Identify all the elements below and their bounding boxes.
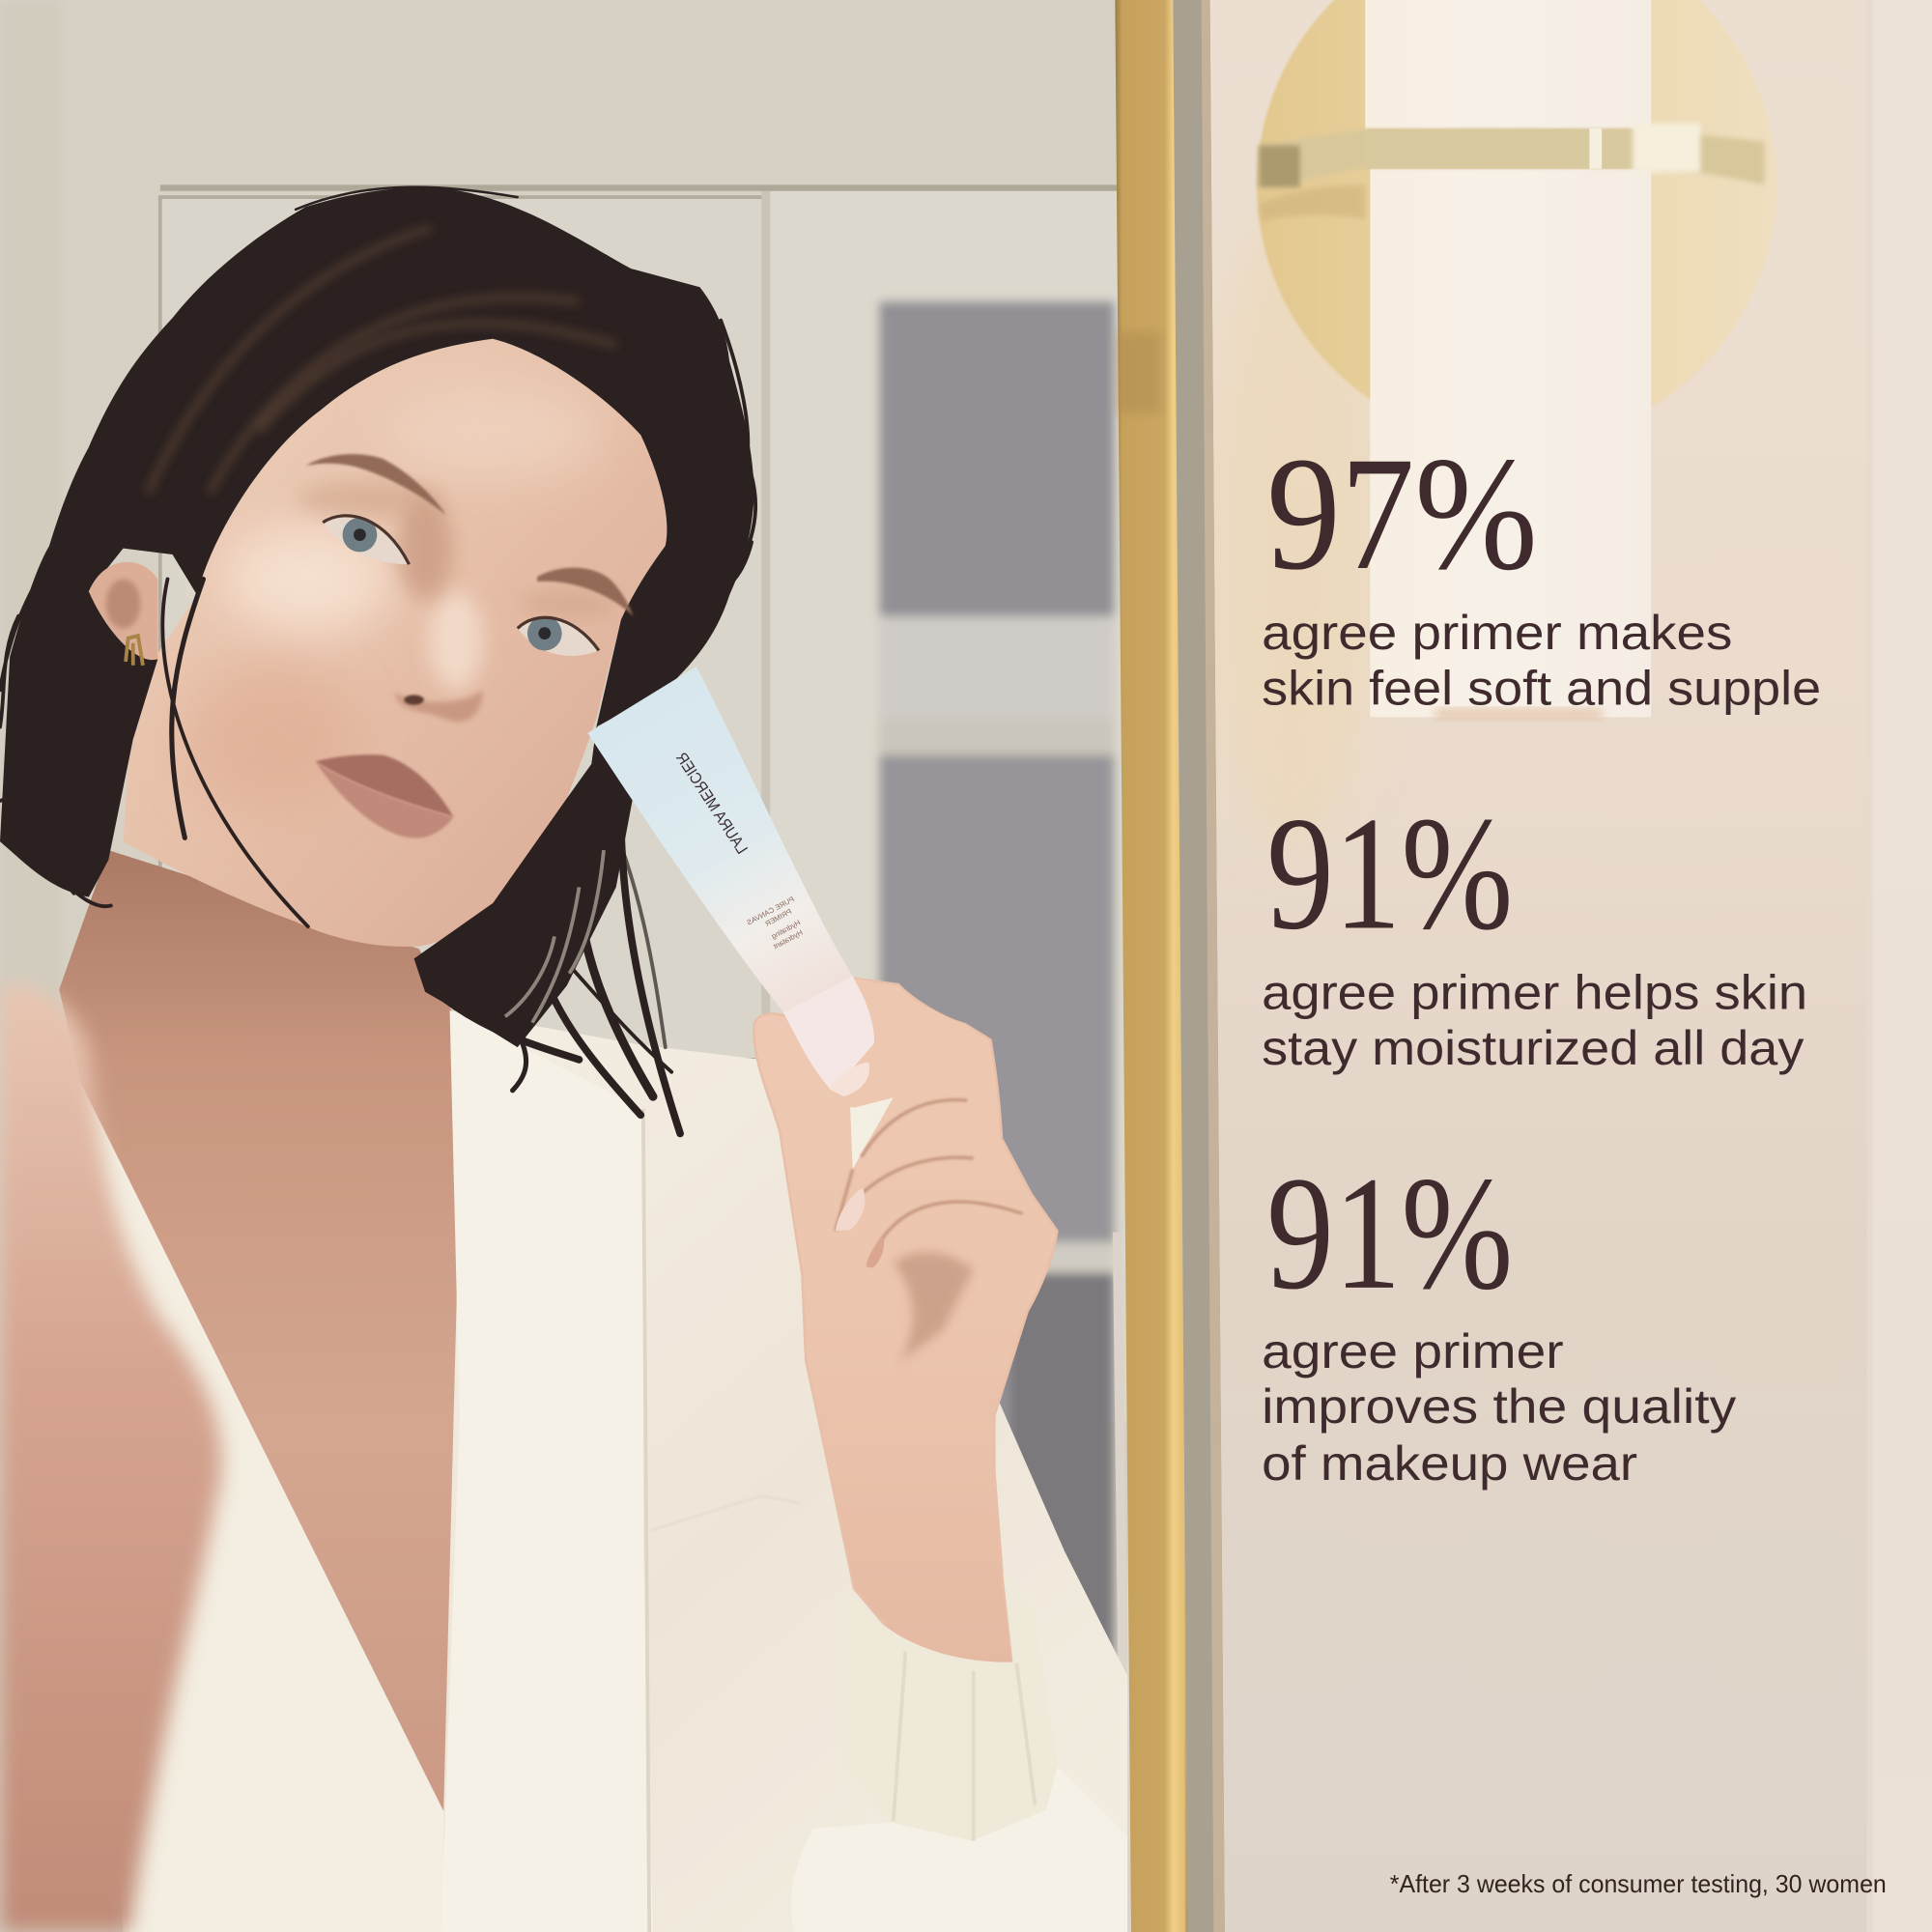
nose	[394, 690, 483, 722]
robe body	[74, 1010, 1127, 1932]
index finger	[829, 979, 993, 1108]
stat: 91% makeup wear: agree primer	[1262, 1324, 1564, 1378]
hand silhouette	[753, 979, 1057, 1671]
tube product text: PURE CANVAS	[746, 895, 796, 927]
ear	[89, 562, 157, 660]
middle fingernail	[836, 1188, 865, 1231]
collar lapels	[81, 1010, 653, 1932]
sconce band	[1260, 129, 1765, 187]
lips	[316, 754, 453, 838]
hair	[0, 187, 754, 897]
shelf cabinet glass	[880, 301, 1114, 1658]
neck and chest	[59, 850, 458, 1811]
tube product text: Hydrating	[770, 918, 802, 941]
stat: 91% moisturized: stay moisturized all day	[1262, 1021, 1804, 1075]
finger creases	[836, 1100, 1023, 1264]
tube product text: PRIMER	[763, 907, 793, 928]
robe gap between thumb and fingers	[850, 1095, 895, 1169]
tube of primer	[587, 667, 882, 1092]
light gaps between strands	[505, 850, 604, 1023]
tube product text	[746, 895, 805, 952]
stat: 91% makeup wear	[1262, 1144, 1736, 1491]
stat: 91% moisturized	[1262, 783, 1807, 1075]
face	[124, 339, 667, 947]
wet hair strands	[0, 187, 755, 1133]
footnote: *After 3 weeks of consumer testing, 30 women	[1390, 1871, 1887, 1898]
stat: 91% moisturized: agree primer helps skin	[1262, 966, 1807, 1020]
robe fold	[650, 1495, 801, 1530]
icon: brass wall sconce	[1257, 0, 1776, 720]
ring fingernail	[867, 1237, 884, 1267]
panel: gold mirror frame	[1113, 0, 1225, 1932]
stat: 97%: agree primer makes	[1262, 606, 1732, 660]
stats text column	[1262, 424, 1821, 1491]
fingers over tube	[829, 979, 1023, 1267]
hair sheen	[148, 228, 616, 493]
eyebrows	[305, 454, 634, 616]
stat: 91% moisturized: 91%	[1266, 783, 1513, 963]
index fingernail	[829, 1062, 869, 1096]
eyes	[323, 516, 599, 656]
blurred foreground hand	[0, 984, 222, 1932]
illustration: woman in mirror	[0, 187, 1127, 1932]
earring	[126, 636, 143, 666]
hair below cheek	[414, 727, 635, 1047]
tube brand text: LAURA MERCIER	[672, 749, 752, 857]
stat: 97%: skin feel soft and supple	[1262, 662, 1821, 716]
face shading and highlights	[185, 382, 616, 813]
panel: mirror background room	[0, 0, 1127, 1932]
palm shadow	[894, 1252, 974, 1361]
stat: 91% makeup wear: improves the quality	[1262, 1379, 1736, 1434]
stat: 97%: 97%	[1266, 424, 1538, 604]
stat: 91% makeup wear: of makeup wear	[1262, 1436, 1637, 1491]
panel: right wall	[1182, 0, 1932, 1932]
stat: 97%	[1262, 424, 1821, 716]
stat: 91% makeup wear: 91%	[1266, 1144, 1513, 1323]
cuff and sleeve	[791, 1573, 1127, 1932]
tube product text: Hydratant	[771, 928, 805, 952]
